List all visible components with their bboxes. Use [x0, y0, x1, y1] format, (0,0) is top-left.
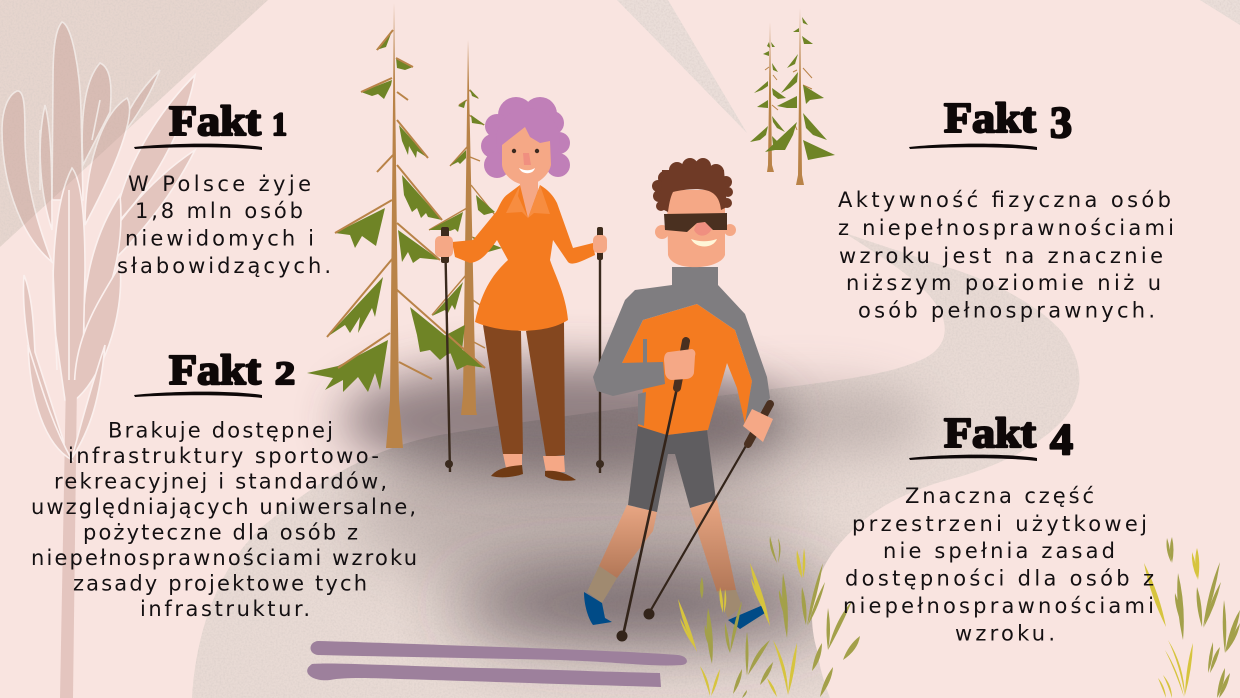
text: Fakt 3 [838, 188, 1174, 322]
orange top [452, 185, 595, 331]
heading: Fakt 2: 2 [275, 356, 295, 392]
hair [481, 97, 570, 178]
ground shadow behind figures [340, 362, 930, 639]
text: Fakt 2: pożyteczne dla osób z [83, 520, 358, 544]
shorts [628, 424, 716, 512]
heading: Fakt 1: 1 [272, 107, 287, 143]
text: Fakt 4: dostępności dla osób z [845, 566, 1154, 590]
text: Fakt 1: W Polsce żyje [128, 172, 311, 196]
eyes nose smile [512, 149, 539, 173]
hands [435, 235, 607, 257]
text: Fakt 2: infrastruktury sportowo- [68, 444, 379, 468]
heading: Fakt 3: Fakt [944, 96, 1036, 142]
text: Fakt 4: niepełnosprawnościami [843, 594, 1154, 618]
woman with walking poles [435, 97, 607, 481]
shoes [584, 592, 765, 629]
ears [655, 224, 736, 239]
smile [691, 239, 717, 246]
orange jacket [622, 304, 752, 435]
text: Fakt 4: przestrzeni użytkowej [852, 512, 1147, 536]
ankles and shoes [491, 454, 576, 481]
text: Fakt 3: Aktywność fizyczna osób [838, 188, 1171, 212]
heading: Fakt 2 [134, 348, 295, 398]
heading: Fakt 4: 4 [1050, 415, 1073, 464]
text: Fakt 3: wzroku jest na znacznie [839, 244, 1163, 268]
collar [506, 185, 550, 218]
pole baskets [616, 608, 654, 642]
text: Fakt 4: wzroku. [955, 622, 1055, 646]
text: Fakt 4 [843, 484, 1154, 646]
text: Fakt 2: niepełnosprawnościami wzroku [31, 546, 417, 570]
trousers [483, 322, 565, 457]
sunglasses [664, 213, 727, 232]
heading: Fakt 1: Fakt [169, 99, 261, 145]
man with walking poles [584, 158, 773, 642]
heading: Fakt 4 [909, 411, 1073, 464]
textured wedge top centre [617, 0, 747, 133]
text: Fakt 2: rekreacyjnej i standardów, [54, 470, 387, 494]
plant illustration left [2, 22, 195, 698]
purple sticks [307, 641, 687, 687]
textured triangle top left [0, 0, 268, 247]
text: Fakt 3: niższym poziomie niż u [846, 271, 1161, 295]
winding road [192, 233, 1080, 698]
grey shoulders and arms [593, 285, 770, 424]
text: Fakt 3: z niepełnosprawnościami [838, 216, 1174, 240]
text: Fakt 1: niewidomych i [125, 226, 314, 250]
text: Fakt 1: 1,8 mln osób [135, 199, 303, 223]
heading: Fakt 1 [134, 99, 287, 150]
heading: Fakt 4: Fakt [944, 411, 1036, 457]
text: Fakt 1 [117, 172, 331, 278]
pine tree back left [425, 40, 502, 415]
pine trees top right [750, 8, 835, 185]
curly hair [652, 158, 733, 212]
heading: Fakt 2: Fakt [169, 348, 261, 394]
grass centre [700, 536, 860, 698]
text: Fakt 4: Znaczna część [905, 484, 1094, 508]
legs [599, 500, 736, 592]
text: Fakt 2: uwzględniających uniwersalne, [31, 495, 416, 519]
poles [441, 227, 604, 473]
heading: Fakt 3: 3 [1050, 98, 1072, 147]
heading: Fakt 3 [909, 96, 1072, 150]
hands [664, 349, 773, 442]
text: Fakt 1: słabowidzących. [117, 254, 331, 278]
text: Fakt 2: Brakuje dostępnej [108, 418, 333, 442]
text: Fakt 3: osób pełnosprawnych. [858, 298, 1155, 322]
text: Fakt 2: infrastruktur. [140, 597, 310, 621]
face [502, 127, 551, 185]
socks [587, 566, 742, 618]
text: Fakt 4: nie spełnia zasad [883, 539, 1115, 563]
text: Fakt 2 [31, 418, 417, 621]
text: Fakt 2: zasady projektowe tych [73, 572, 367, 596]
torso grey strips [638, 339, 647, 426]
face [667, 190, 725, 267]
nose [694, 221, 713, 236]
pole grips [677, 341, 770, 444]
collar [672, 267, 718, 292]
pine tree large left [307, 3, 485, 448]
poles [622, 388, 747, 640]
grass right [1166, 537, 1240, 698]
neck [520, 180, 538, 218]
textured wedge top right [1200, 0, 1240, 25]
